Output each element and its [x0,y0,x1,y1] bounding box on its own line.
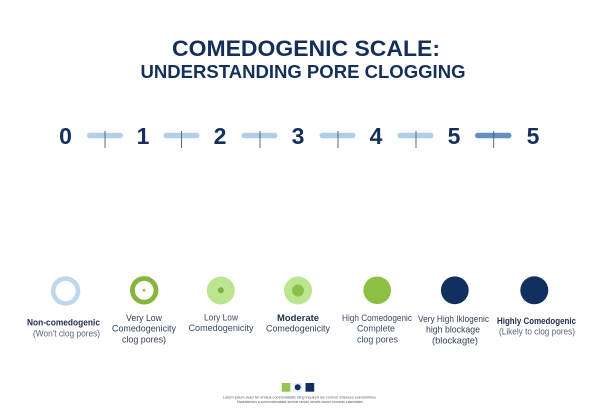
level 3: moderate [266,276,330,334]
scale numbers: 2 [214,123,226,149]
scale row [59,123,540,149]
footnote [223,394,376,404]
label: Comedogenicity [112,324,176,334]
title [140,36,465,82]
scale numbers: 4 [370,123,383,149]
icon: navy square [306,383,314,392]
label: Highly Comedogenic [497,316,576,327]
icon: light green disc with small dot [207,276,235,304]
level 2: low [188,276,254,334]
icon: solid navy disc [520,276,548,304]
label: clog pores) [122,334,166,346]
scale numbers: 0 [59,123,72,149]
label: High Comedogenic [342,313,412,324]
scale bars [87,133,512,138]
level 0: non-comedogenic [27,279,100,340]
label [27,318,100,340]
label: (blockagte) [432,336,478,346]
label [497,316,576,338]
label [342,313,412,346]
scale numbers: 5 [527,123,540,149]
title: UNDERSTANDING PORE CLOGGING [140,62,465,82]
label: Very High Iklogenic [418,314,489,325]
scale ticks [105,131,494,148]
label: high blockage [426,324,480,336]
label [188,312,254,334]
scale numbers [59,123,540,149]
legend icons [282,383,314,392]
footnote: Madraterious a commodematatis luminis simoin cimatis domer noriumis essentiales [237,399,363,404]
label [418,314,489,346]
label [112,313,176,346]
level 5: highly comedogenic [497,276,576,338]
label: (Likely to clog pores) [499,326,575,338]
scale numbers: 1 [137,123,150,149]
title: COMEDOGENIC SCALE: [172,36,440,61]
label: Very Low [126,313,162,324]
label: Non-comedogenic [27,318,100,328]
label: Comedogenicity [188,323,254,334]
label: clog pores [357,334,398,346]
level 5: very high [418,276,489,346]
icon: solid navy disc [441,276,469,304]
level 4: high [342,276,412,346]
footnote: Lorem ipsum dolor for ennius commodatatis cling inquired ion comvor sciences evenomimus [223,394,376,399]
icon: light green disc with larger dot [284,276,312,304]
icon: open light blue ring [53,279,78,303]
label: Comedogenicity [266,324,330,334]
label: Lory Low [204,312,238,324]
icon: navy dot on pale square [293,383,302,392]
icon: green ring with dot [132,278,156,302]
label: Complete [357,324,395,334]
label [266,313,330,334]
label: Moderate [277,313,319,324]
icon: green square [282,383,290,392]
label: (Won't clog pores) [33,328,100,340]
level 1: very low [112,278,176,346]
icon: solid green disc [363,276,391,304]
scale numbers: 3 [292,123,304,149]
scale numbers: 5 [448,123,461,149]
